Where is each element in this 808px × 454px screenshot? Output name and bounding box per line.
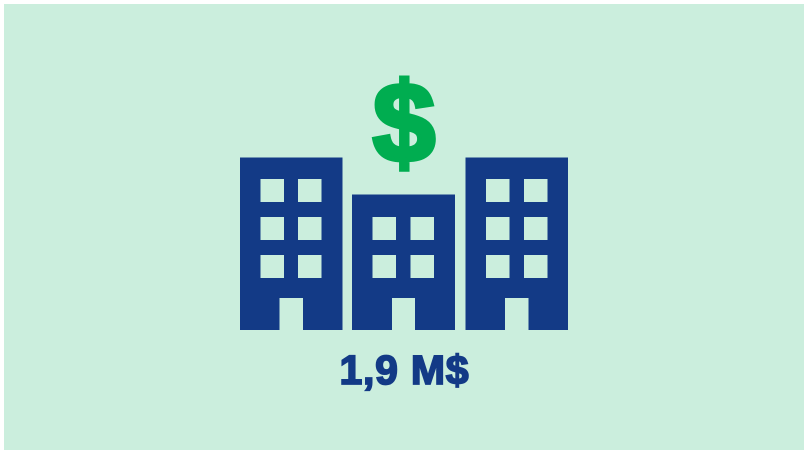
icon: right building xyxy=(466,158,568,330)
icon: left building xyxy=(240,158,342,330)
icon: green dollar sign: $ xyxy=(373,60,435,185)
amount label: 1,9 M$ xyxy=(340,347,469,393)
icon: middle building xyxy=(352,194,455,330)
